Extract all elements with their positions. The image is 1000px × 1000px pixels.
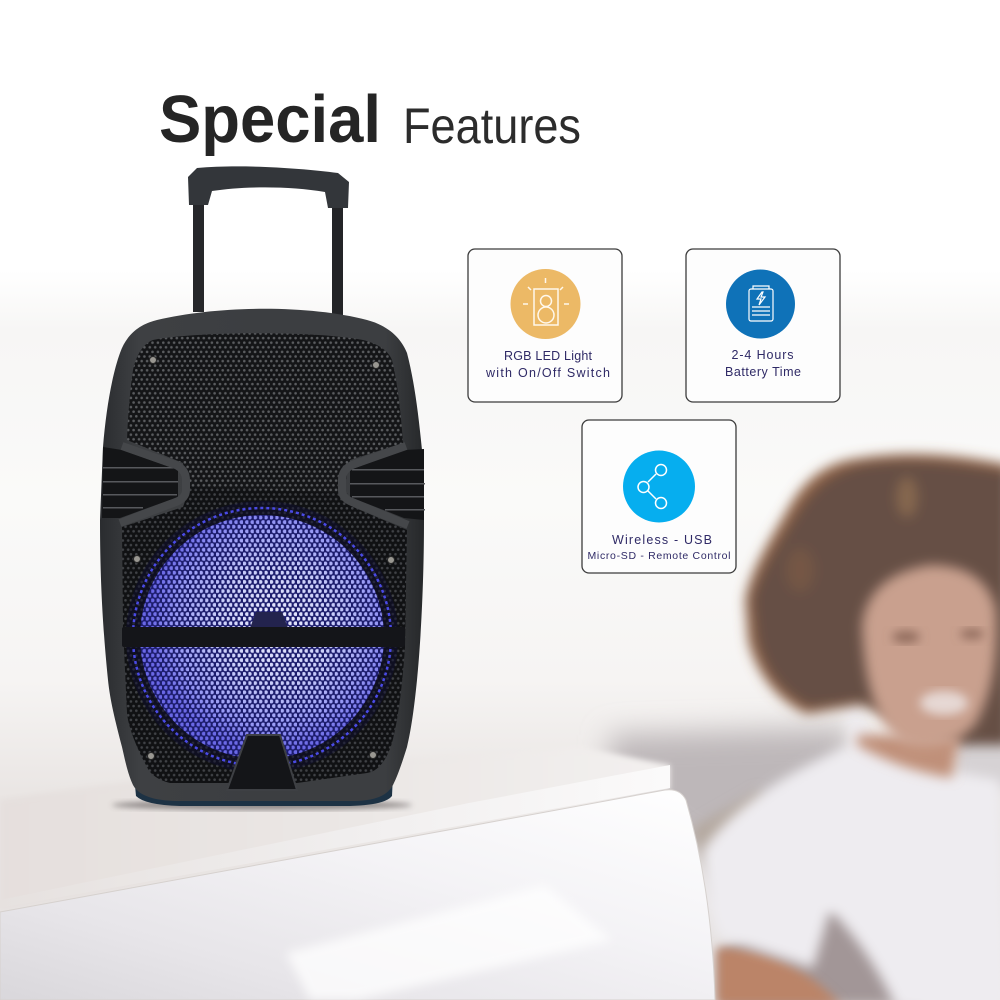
panel: battery time: Battery Time [725,365,801,379]
hair [745,454,1000,745]
couch shadow [610,728,850,850]
arm [717,948,842,1000]
table edge strip [0,765,670,908]
lower couch [694,792,758,872]
shirt [703,700,1000,1000]
table front [0,790,715,1000]
woofer [126,501,398,773]
panel: RGB LED light: RGB LED Light [504,349,593,363]
face [862,565,997,748]
speaker cabinet [100,309,424,801]
right vent [342,446,425,525]
icon: speaker light [510,269,580,339]
panel: RGB LED light: with On/Off Switch [485,366,610,380]
title: Features [403,98,581,154]
panel: battery time: 2-4 Hours [732,348,794,362]
neck [857,735,960,778]
left vent [102,446,186,523]
center band [122,627,405,647]
panel: connectivity [582,420,736,573]
top grille [127,333,403,500]
title: Special [159,82,381,157]
bottom tab [227,735,297,790]
panel: connectivity: Wireless - USB [612,533,712,547]
speaker lower base [134,775,393,806]
gap under sleeve [714,909,900,1000]
lower grille [122,487,407,783]
panel: battery time [686,249,840,402]
trolley handle [188,166,349,316]
table reflection [286,885,612,1000]
eyes [892,629,984,643]
table top [0,747,670,910]
blurred room and woman [610,454,1000,1000]
panel: RGB LED light [468,249,622,402]
icon: share nodes [623,450,695,522]
title [159,82,581,157]
panel: connectivity: Micro-SD - Remote Control [588,550,730,562]
speaker [100,166,425,810]
icon: battery [726,270,795,338]
right wall [956,742,1000,786]
smile [920,691,968,715]
speaker shadow [112,800,412,810]
screws [134,356,394,760]
